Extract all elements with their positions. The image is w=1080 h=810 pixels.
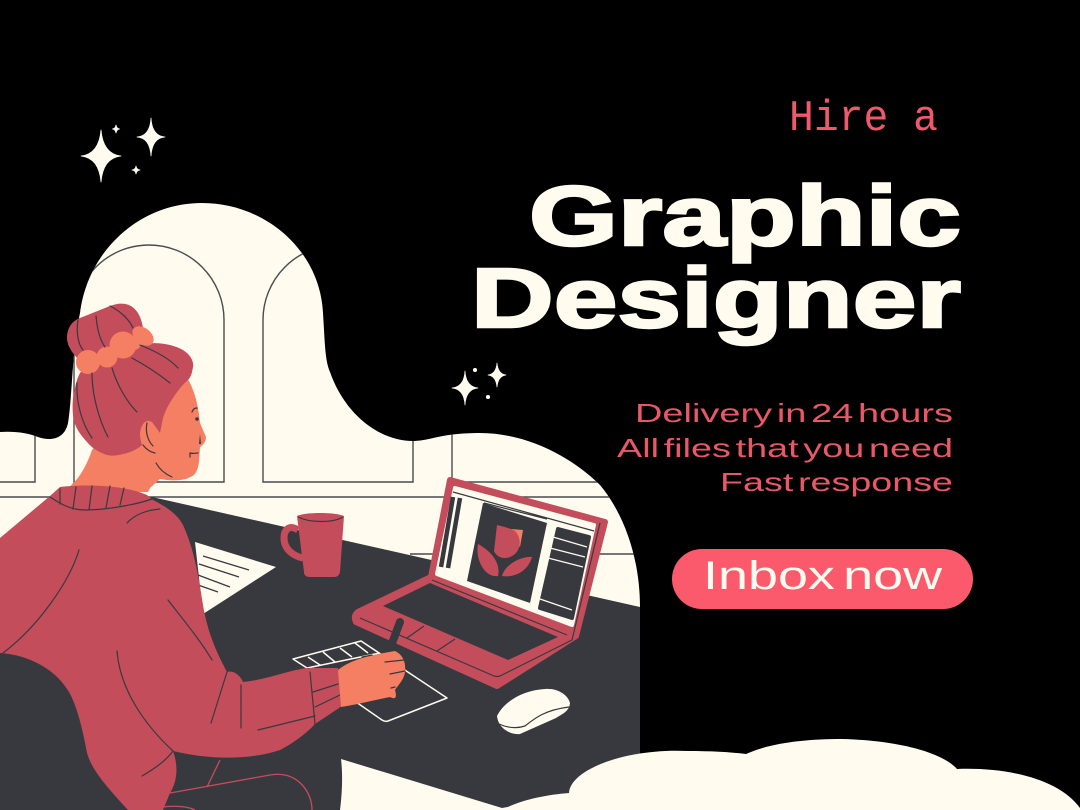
neck and face: [66, 376, 206, 492]
hand: [338, 651, 405, 707]
sweater: [0, 486, 342, 810]
button: Inbox now: [672, 549, 973, 609]
scrunchie: [76, 322, 157, 374]
button: Inbox now: Inbox now: [703, 554, 942, 598]
collar and sweater lines: [3, 486, 340, 776]
ear: [140, 421, 160, 453]
woman: [0, 304, 405, 810]
tablet: [293, 641, 447, 721]
hair: [73, 343, 193, 456]
stylus: [391, 622, 400, 646]
paper on desk: [195, 542, 276, 614]
sparkles: middle: [452, 363, 506, 405]
face lines: [143, 408, 198, 477]
keyboard: [383, 583, 558, 660]
laptop: [355, 480, 605, 686]
title: Graphic Designer: Graphic: [529, 169, 961, 263]
heading: Hire a: Hire a: [789, 94, 938, 144]
artboard: [467, 503, 547, 603]
laptop body: [355, 480, 605, 686]
hair strands: [77, 306, 178, 438]
mug: [284, 513, 344, 577]
chair frame lines: [147, 760, 312, 810]
side panel: [540, 529, 589, 618]
laptop screen: [437, 488, 594, 625]
illustration: desk and chair: [0, 497, 640, 810]
mouse: [497, 689, 570, 734]
cloud: [502, 739, 1080, 810]
title: Graphic Designer: Designer: [471, 251, 961, 345]
title: Graphic Designer: [471, 169, 961, 345]
sparkles: top left: [81, 118, 165, 182]
feature list: All files that you need: [617, 433, 953, 463]
feature list: Fast response: [720, 467, 953, 497]
tulip icon: [477, 525, 532, 576]
feature list: [617, 398, 953, 497]
feature list: Delivery in 24 hours: [635, 398, 953, 428]
bun: [67, 304, 143, 372]
illustration: window wall: [0, 203, 640, 810]
